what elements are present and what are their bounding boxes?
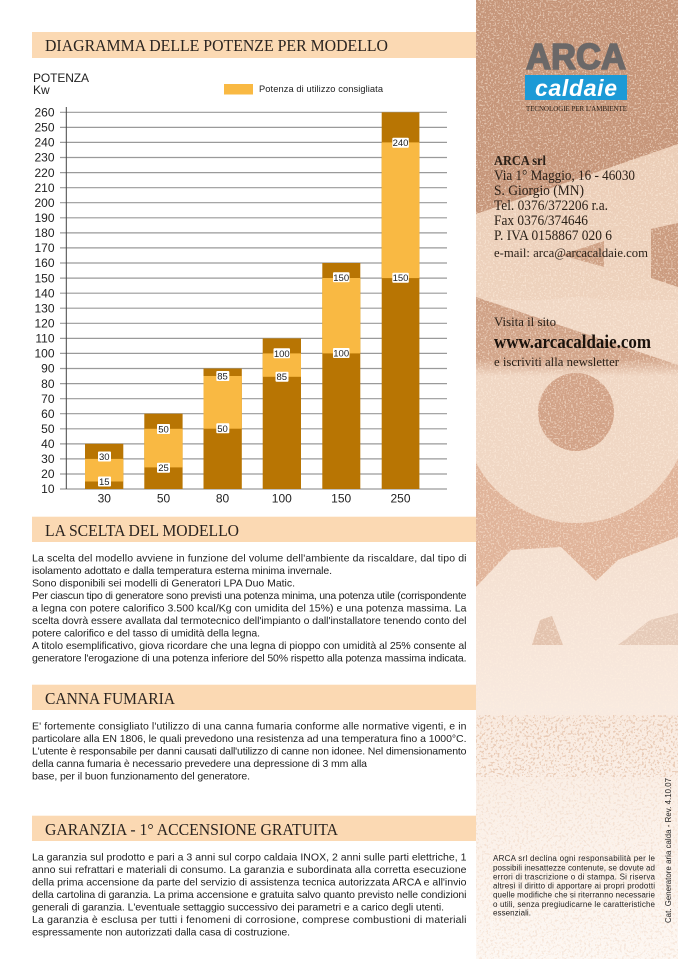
disclaimer: ARCA srl declina ogni responsabilità per le <box>493 854 656 863</box>
logo: ARCA caldaie: caldaie <box>535 75 617 101</box>
logo: ARCA caldaie: TECNOLOGIE PER L'AMBIENTE <box>526 105 627 113</box>
bar: model 150 <box>322 263 360 506</box>
text block: la scelta del modello: La scelta del modello avviene in funzione del volume dell'ambiente da riscaldare, dal tipo di <box>32 552 466 564</box>
heading: canna fumaria <box>32 685 476 710</box>
text block: garanzia: anno sui refrattari e materiali di consumo. La garanzia e subordinata alla corretta esecuzione <box>32 864 467 876</box>
sidebar textured background <box>463 0 678 959</box>
y axis labels: 90 <box>41 362 55 376</box>
background shape: lower ring band <box>476 440 678 587</box>
bar: model 150: 150 <box>331 492 352 506</box>
background shape: small triangle <box>561 241 604 267</box>
y axis labels: 80 <box>41 377 55 391</box>
bar: model 150: 100 <box>333 348 349 360</box>
y axis labels: 240 <box>34 136 55 150</box>
website call to action: e iscriviti alla newsletter <box>494 354 620 369</box>
bar: model 100: 100 <box>272 492 292 506</box>
text block: garanzia: generali di garanzia. L'eventuale settaggio successivo dei parametri e a carico degli utenti. <box>32 902 444 914</box>
text block: canna fumaria: particolare alla EN 1806, le quali prevedono una resistenza ad una temperatura fino a 1000°C. <box>32 733 466 745</box>
y axis labels: 190 <box>34 211 55 225</box>
disclaimer: possibili inesattezze contenute, se dovute ad <box>493 863 655 872</box>
text block: canna fumaria: della canna fumaria è necessario prevedere una depressione di 3 mm alla <box>32 758 367 770</box>
bar: model 30: 30 <box>98 492 111 506</box>
text block: la scelta del modello: A titolo esemplificativo, giova ricordare che una legna di pioppo con umidità al 25% consente al <box>32 640 466 652</box>
text block: canna fumaria: base, per il buon funzionamento del generatore. <box>32 770 250 782</box>
bar: model 80: 50 <box>217 424 228 435</box>
bar: model 50: 50 <box>158 424 169 436</box>
bar: model 100 <box>263 338 301 506</box>
speckle overlay <box>476 0 678 959</box>
background shape: diagonal band <box>476 297 678 376</box>
catalogue revision note: Cat. Generatore aria calda - Rev. 4.10.07 <box>664 778 673 923</box>
y axis labels: 180 <box>34 226 55 240</box>
y axis labels: 120 <box>34 316 55 330</box>
bar chart <box>34 106 447 506</box>
bar: model 250: 250 <box>390 492 411 506</box>
text block: canna fumaria: L'utente è responsabile per danni causati dall'utilizzo di canne non idonee. Nel dimensionamento <box>32 745 467 757</box>
text block: garanzia: La garanzia sul prodotto e pari a 3 anni sul corpo caldaia INOX, 2 anni sulle parti elettriche, 1 <box>32 851 467 863</box>
logo: ARCA caldaie: ARCA <box>526 36 626 77</box>
website call to action: www.arcacaldaie.com <box>494 333 652 353</box>
contact details: P. IVA 0158867 020 6 <box>494 228 612 244</box>
y axis labels: 230 <box>34 151 55 165</box>
bar: model 50 <box>144 414 183 506</box>
y axis labels: 110 <box>35 332 55 346</box>
bar: model 30 <box>85 444 123 506</box>
text block: garanzia: espressamente non autorizzati dalla casa di costruzione. <box>32 926 290 938</box>
disclaimer: quelle modifiche che si riterranno necessarie <box>493 891 656 900</box>
text block: la scelta del modello: scelta dovrà essere avallata dal termotecnico dell'impianto o dall'installatore tenendo conto del <box>32 615 466 627</box>
bar: model 50: 25 <box>158 463 169 474</box>
text block: canna fumaria <box>32 720 467 782</box>
y axis labels: 160 <box>34 256 55 270</box>
contact details: ARCA srl <box>494 154 546 169</box>
y axis labels: 220 <box>34 166 55 180</box>
contact details: Tel. 0376/372206 r.a. <box>494 198 608 214</box>
y axis labels: 130 <box>34 301 55 315</box>
bar: model 100: 85 <box>277 372 287 383</box>
y axis labels <box>34 106 55 496</box>
axis title: POTENZA <box>33 71 89 85</box>
logo: ARCA caldaie <box>525 36 627 113</box>
background shape: large circle <box>463 297 678 523</box>
y axis labels: 260 <box>34 106 55 120</box>
text block: la scelta del modello: Per ciascun tipo di generatore sono previsti una potenza minima, una potenza utile (corrispondente <box>32 590 467 602</box>
disclaimer: altresì il diritto di apportare ai propri prodotti <box>493 882 655 891</box>
heading: la scelta del modello <box>32 517 476 542</box>
heading: diagramma <box>32 32 476 58</box>
background shape: inner dot <box>538 373 614 451</box>
y axis labels: 140 <box>34 286 55 300</box>
legend: Potenza di utilizzo consigliata <box>259 84 384 94</box>
background shape: right block <box>651 223 678 287</box>
disclaimer: errori di trascrizione o di stampa. Si riserva <box>493 872 656 881</box>
axis title <box>33 71 89 97</box>
y axis labels: 60 <box>41 407 55 421</box>
contact details: Via 1° Maggio, 16 - 46030 <box>494 168 635 184</box>
bar: model 150: 150 <box>333 273 349 284</box>
text block: canna fumaria: E' fortemente consigliato l'utilizzo di una canna fumaria conforme alle normative vigenti, e in <box>32 720 467 732</box>
y axis labels: 200 <box>34 196 55 210</box>
heading: garanzia <box>32 816 476 841</box>
y axis labels: 150 <box>34 271 55 285</box>
heading: la scelta del modello: LA SCELTA DEL MODELLO <box>45 521 239 540</box>
bar: model 100: 100 <box>274 349 290 360</box>
text block: la scelta del modello: isolamento adottato e dalla temperatura esterna minima invernale. <box>32 565 332 577</box>
text block: garanzia: della cartolina di garanzia. La prima accensione e gratuita salvo quanto previsto nelle condizioni <box>32 889 466 901</box>
disclaimer: essenziali. <box>493 909 531 918</box>
bar: model 30: 15 <box>99 477 110 488</box>
y axis labels: 250 <box>34 120 55 134</box>
text block: la scelta del modello <box>32 552 467 664</box>
y axis labels: 10 <box>41 482 55 496</box>
bar: model 250: 150 <box>393 273 408 284</box>
background shape: right lower mark <box>618 613 678 645</box>
bar: model 250 <box>382 112 419 506</box>
y axis labels: 50 <box>41 422 55 436</box>
heading: garanzia: GARANZIA - 1° ACCENSIONE GRATUITA <box>45 820 339 839</box>
contact details: Fax 0376/374646 <box>494 213 588 229</box>
background shape: upper light fill <box>476 300 678 410</box>
text block: la scelta del modello: generatore l'erogazione di una potenza inferiore del 50% rispetto alla potenza massima indicata. <box>32 652 466 664</box>
text block: garanzia: La garanzia è esclusa per tutti i fenomeni di corrosione, comprese combustioni di materiali <box>32 914 466 926</box>
text block: la scelta del modello: a legna con potere calorifico 3.500 kcal/Kg con umidita del 15%) e una potenza massima. La <box>32 602 467 614</box>
y axis labels: 170 <box>34 241 55 255</box>
y axis labels: 20 <box>41 467 55 481</box>
text block: la scelta del modello: Sono disponibili sei modelli di Generatori LPA Duo Matic. <box>32 577 295 589</box>
bar: model 250: 240 <box>393 138 408 149</box>
disclaimer <box>493 854 656 918</box>
main white panel <box>0 0 476 959</box>
axis title: Kw <box>33 83 50 97</box>
website call to action <box>494 314 652 369</box>
brown speckle strip <box>476 715 678 777</box>
y axis labels: 70 <box>41 392 55 406</box>
y axis labels: 40 <box>41 437 55 451</box>
heading: diagramma: DIAGRAMMA DELLE POTENZE PER MODELLO <box>45 36 388 55</box>
contact details: e-mail: arca@arcacaldaie.com <box>494 245 648 260</box>
disclaimer: o utili, senza pregiudicarne le caratteristiche <box>493 900 656 909</box>
y axis labels: 30 <box>41 452 55 466</box>
text block: garanzia: della prima accensione da parte del servizio di assistenza tecnica autorizzata ARCA e all'invio <box>32 876 467 888</box>
heading: canna fumaria: CANNA FUMARIA <box>45 689 176 708</box>
text block: la scelta del modello: potere calorifico e del tasso di umidità della legna. <box>32 627 260 639</box>
background shape: small lower mark <box>532 616 563 645</box>
bar: model 30: 30 <box>99 452 110 463</box>
y axis labels: 210 <box>34 181 55 195</box>
y axis labels: 100 <box>34 347 55 361</box>
website call to action: Visita il sito <box>494 314 556 329</box>
bar: model 80: 80 <box>216 492 229 506</box>
bar: model 80 <box>204 368 242 506</box>
bar: model 80: 85 <box>217 372 228 382</box>
contact details <box>494 154 648 260</box>
contact details: S. Giorgio (MN) <box>494 183 584 199</box>
bar: model 50: 50 <box>157 492 170 506</box>
faint brown speckle at bottom <box>476 777 678 959</box>
background shape: dark top area <box>476 0 678 214</box>
text block: garanzia <box>32 851 467 938</box>
